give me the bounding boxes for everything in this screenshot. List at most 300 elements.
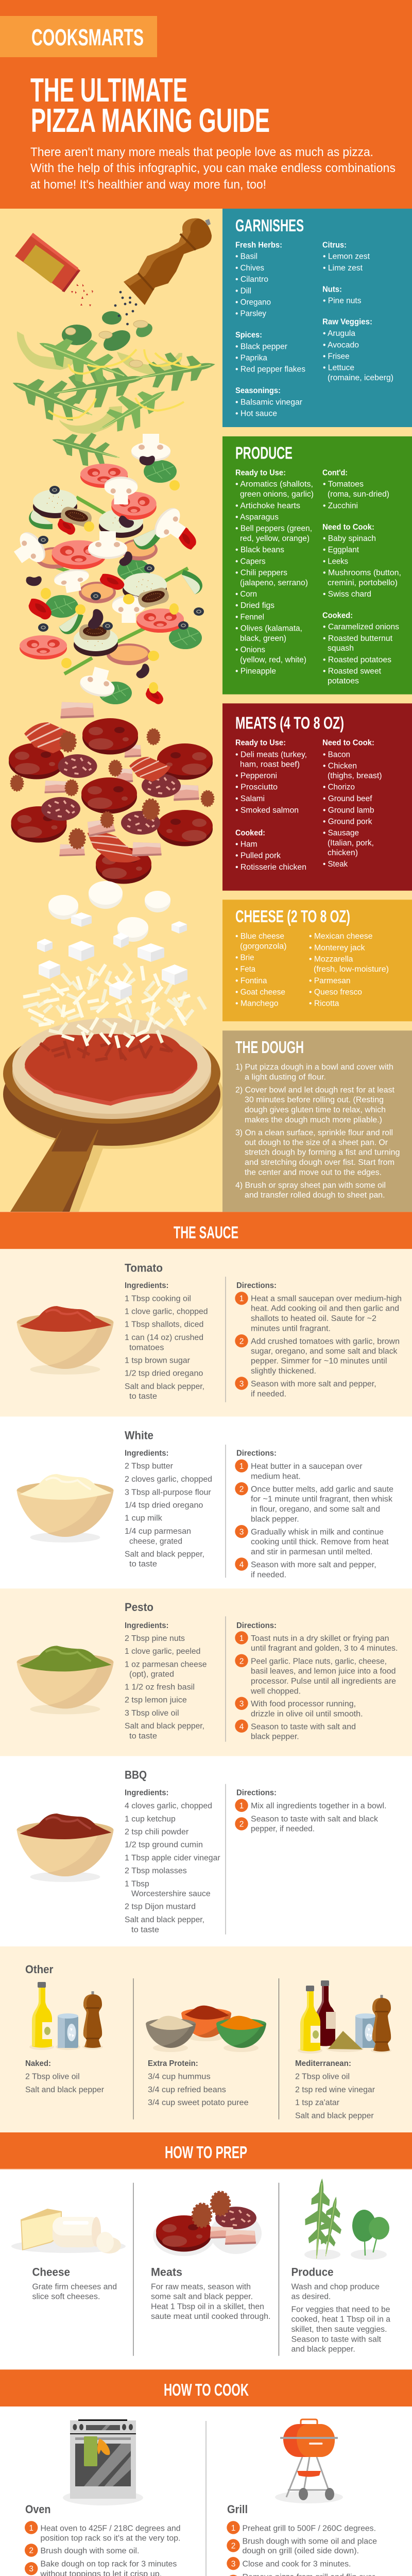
icon: eggplant slices: [33, 489, 167, 656]
panel: cheese: [222, 900, 412, 1021]
list: tomato directions: 2: [239, 1337, 244, 1346]
list: produce right column: • Roasted potatoes: [323, 655, 391, 664]
list: garnishes left column: [235, 241, 305, 418]
list: cheese left column: • Manchego: [235, 999, 278, 1008]
icon: pizza peel: [3, 1018, 224, 1212]
list: pesto ingredients: 3 Tbsp olive oil: [125, 1709, 179, 1718]
list: produce left column: • Onions: [235, 646, 265, 654]
text: dough steps: makes the dough much more pliable.): [245, 1115, 382, 1124]
text: prep meats: Meats: [151, 2266, 182, 2279]
icon: pesto bowl: [16, 1646, 113, 1714]
list: cheese left column: • Fontina: [235, 976, 267, 985]
panel: produce: [222, 436, 412, 694]
icon: oven: [63, 2419, 143, 2505]
list: produce left column: • Dried figs: [235, 601, 274, 610]
text: mediterranean: Mediterranean:: [295, 2059, 351, 2068]
text: prep produce: Produce: [291, 2266, 334, 2279]
text: prep cheese: slice soft cheeses.: [32, 2293, 100, 2301]
list: tomato ingredients: [125, 1281, 208, 1401]
list: white ingredients: 3 Tbsp all-purpose flour: [125, 1488, 211, 1497]
text: dough steps: dough gives gluten time to relax, which: [245, 1106, 386, 1114]
list: white directions: Season with more salt and pepper,: [251, 1561, 376, 1569]
list: oven steps: 2: [29, 2546, 33, 2555]
list: garnishes right column: • Lettuce: [323, 364, 354, 372]
title: PIZZA MAKING GUIDE: [31, 101, 270, 139]
text: dough steps: 2) Cover bowl and let dough rest for at least: [235, 1086, 395, 1095]
list: tomato ingredients: 1 Tbsp cooking oil: [125, 1294, 191, 1303]
list: grill steps: Preheat grill to 500F / 260C degrees.: [242, 2524, 376, 2533]
list: pesto directions: well chopped.: [250, 1687, 301, 1696]
list: meats left column: • Deli meats (turkey,: [235, 750, 307, 759]
icon: avocado slices: [17, 331, 182, 434]
illustration: cheese falling onto pizza peel: [3, 881, 224, 1212]
list: garnishes left column: • Black pepper: [235, 342, 287, 351]
heading: cheese: CHEESE (2 TO 8 OZ): [235, 907, 350, 926]
list: pesto directions: drizzle in olive oil until smooth.: [251, 1709, 363, 1718]
icon: produce leaves: [302, 2177, 389, 2260]
list: garnishes left column: • Basil: [235, 252, 258, 261]
text: dough steps: out dough to the size of a sheet pan. Or: [245, 1139, 388, 1147]
section: bbq sauce: [0, 1756, 412, 1946]
text: prep produce: For veggies that need to be: [291, 2306, 390, 2314]
list: pesto directions: until fragrant and golden, 3 to 4 minutes.: [251, 1644, 398, 1653]
text: mediterranean: 2 Tbsp olive oil: [295, 2072, 350, 2081]
list: produce left column: green onions, garlic): [240, 490, 314, 499]
list: produce left column: [235, 469, 314, 675]
list: bbq ingredients: Worcestershire sauce: [131, 1889, 211, 1898]
list: garnishes left column: • Hot sauce: [235, 410, 277, 418]
list: meats right column: • Sausage: [323, 829, 359, 838]
list: garnishes left column: Seasonings:: [235, 386, 281, 395]
list: white ingredients: 1/4 cup parmesan: [125, 1527, 191, 1536]
list: tomato directions: minutes until fragrant.: [251, 1324, 331, 1333]
list: pesto directions: 2: [239, 1657, 244, 1666]
heading: tomato: Tomato: [125, 1261, 163, 1274]
list: meats right column: • Chicken: [323, 761, 357, 770]
text: naked: 2 Tbsp olive oil: [25, 2072, 80, 2081]
list: bbq directions: Directions:: [236, 1789, 277, 1798]
icon: ground meat: [11, 729, 214, 849]
list: meats right column: (thighs, breast): [328, 772, 382, 781]
text: mediterranean: [295, 2059, 375, 2120]
list: produce left column: • Olives (kalamata,: [235, 624, 302, 633]
list: produce left column: Ready to Use:: [235, 469, 286, 478]
list: produce right column: • Zucchini: [323, 501, 358, 510]
icon: bacon front pieces: [87, 818, 162, 856]
text: mediterranean: 2 tsp red wine vinegar: [295, 2086, 375, 2094]
list: tomato ingredients: to taste: [129, 1392, 157, 1401]
icon: arugula leaves: [5, 323, 218, 474]
icon: asparagus: [40, 497, 188, 674]
list: garnishes left column: • Cilantro: [235, 275, 268, 284]
heading: other: Other: [25, 1963, 54, 1976]
list: meats right column: • Chorizo: [323, 783, 355, 792]
list: bbq ingredients: Ingredients:: [125, 1789, 169, 1798]
list: produce left column: • Bell peppers (green,: [235, 524, 312, 533]
intro text: There aren't many more meals that people love as much as pizza.: [30, 145, 373, 159]
list: pesto directions: [235, 1621, 398, 1741]
list: produce right column: • Baby spinach: [323, 534, 376, 543]
text: dough steps: 1) Put pizza dough in a bowl and cover with: [235, 1063, 393, 1072]
list: pesto ingredients: Salt and black pepper,: [125, 1722, 204, 1731]
icon: salami slices: [41, 754, 181, 835]
list: meats left column: • Pepperoni: [235, 772, 277, 781]
text: extra protein: Extra Protein:: [148, 2059, 198, 2068]
panel: meats: [222, 703, 412, 891]
list: produce right column: [322, 469, 401, 686]
list: garnishes right column: • Lime zest: [323, 264, 363, 273]
list: meats left column: • Smoked salmon: [235, 806, 299, 815]
list: bbq directions: Season to taste with salt and black: [251, 1815, 378, 1823]
list: oven steps: 3: [29, 2565, 33, 2573]
list: bbq directions: [235, 1789, 386, 1834]
section: other sauces: [0, 1946, 412, 2132]
list: produce right column: potatoes: [328, 677, 359, 686]
list: tomato directions: Season with more salt and pepper,: [251, 1380, 376, 1388]
list: garnishes left column: • Balsamic vinegar: [235, 398, 302, 406]
icon: red peppers: [29, 519, 200, 704]
text: extra protein: [148, 2059, 249, 2107]
heading: white: White: [125, 1429, 153, 1442]
list: bbq ingredients: 2 tsp chili powder: [125, 1828, 188, 1837]
list: pesto ingredients: 1 clove garlic, peeled: [125, 1647, 200, 1656]
list: tomato directions: shallots to heated oil. Saute for ~2: [251, 1314, 376, 1323]
list: tomato directions: Add crushed tomatoes with garlic, brown: [251, 1337, 400, 1346]
list: pesto ingredients: to taste: [129, 1732, 157, 1740]
band: the sauce: THE SAUCE: [174, 1223, 238, 1242]
list: bbq ingredients: 1/2 tsp ground cumin: [125, 1841, 203, 1850]
list: pesto directions: black pepper.: [251, 1733, 299, 1741]
heading: pesto: Pesto: [125, 1601, 153, 1614]
icon: corn kernels: [41, 480, 180, 693]
text: dough steps: [235, 1063, 400, 1200]
list: meats right column: [322, 739, 382, 869]
band: how to cook: [0, 2369, 412, 2406]
text: prep produce: [291, 2266, 390, 2354]
list: white directions: medium heat.: [251, 1472, 301, 1481]
toppings background: [0, 209, 412, 1212]
icon: shredded cheese: [23, 963, 205, 1048]
list: meats right column: • Steak: [323, 860, 348, 869]
list: pesto directions: processor. Pulse until all ingredients are: [251, 1677, 396, 1686]
icon: basil leaves: [62, 311, 155, 355]
text: dough steps: and transfer rolled dough to sheet pan.: [245, 1191, 385, 1200]
list: meats right column: • Bacon: [323, 750, 350, 759]
text: dough steps: the center and move out to the edges.: [245, 1168, 382, 1177]
list: cheese right column: • Mozzarella: [309, 955, 353, 964]
illustration: garnishes falling: [5, 218, 218, 474]
illustration: produce falling: [8, 434, 205, 704]
list: produce right column: Cooked:: [322, 611, 353, 620]
list: white ingredients: 2 cloves garlic, chopped: [125, 1475, 212, 1484]
list: white directions: [235, 1449, 393, 1579]
text: prep produce: and black pepper.: [291, 2345, 355, 2354]
list: meats left column: • Ham: [235, 840, 258, 849]
text: prep produce: cooked, heat 1 Tbsp oil in a: [291, 2315, 390, 2324]
list: pesto ingredients: 1 1/2 oz fresh basil: [125, 1683, 195, 1691]
icon: bbq bowl: [16, 1814, 113, 1882]
band: how to cook: HOW TO COOK: [164, 2380, 249, 2399]
list: oven steps: [25, 2521, 183, 2576]
list: bbq ingredients: 2 Tbsp molasses: [125, 1867, 187, 1875]
icon: white sauce bowl: [16, 1474, 113, 1543]
list: pesto directions: Directions:: [236, 1621, 277, 1630]
list: bbq ingredients: 1 Tbsp apple cider vinegar: [125, 1854, 220, 1862]
text: dough steps: 4) Brush or spray sheet pan with some oil: [235, 1181, 386, 1190]
list: produce left column: • Asparagus: [235, 513, 279, 522]
list: produce left column: • Capers: [235, 557, 266, 566]
list: tomato ingredients: Ingredients:: [125, 1281, 169, 1290]
list: garnishes left column: • Dill: [235, 286, 251, 295]
icon: black pepper: [114, 291, 137, 325]
list: meats left column: • Prosciutto: [235, 783, 278, 792]
list: cheese right column: • Parmesan: [309, 976, 350, 985]
text: prep meats: For raw meats, season with: [151, 2282, 251, 2291]
list: pesto directions: Toast nuts in a dry skillet or frying pan: [251, 1634, 389, 1643]
section: pesto sauce: [0, 1588, 412, 1756]
band: the sauce: [0, 1212, 412, 1249]
section: white sauce: [0, 1417, 412, 1588]
list: tomato ingredients: 1 tsp brown sugar: [125, 1356, 190, 1365]
band: how to prep: HOW TO PREP: [165, 2143, 247, 2162]
list: cheese left column: • Brie: [235, 954, 254, 962]
icon: pepperoni slices: [9, 718, 213, 884]
list: produce left column: (yellow, red, white): [240, 655, 306, 664]
list: produce right column: squash: [328, 644, 354, 653]
list: white directions: 3: [239, 1528, 244, 1536]
icon: mushrooms: [8, 434, 192, 700]
text: prep produce: skillet, then saute veggies.: [291, 2325, 387, 2334]
list: white directions: and stir in parmesan until melted.: [251, 1548, 373, 1556]
title: THE ULTIMATE: [30, 71, 187, 109]
list: produce right column: • Mushrooms (button,: [323, 569, 401, 578]
list: white directions: 4: [239, 1561, 244, 1569]
list: tomato directions: 3: [239, 1380, 244, 1388]
list: meats right column: • Ground pork: [323, 817, 372, 826]
section: tomato sauce: [0, 1249, 412, 1417]
text: prep produce: Wash and chop produce: [291, 2282, 380, 2291]
list: white directions: Directions:: [236, 1449, 277, 1458]
list: garnishes right column: • Pine nuts: [323, 296, 362, 305]
list: meats left column: • Salami: [235, 794, 265, 803]
list: pesto directions: 1: [239, 1634, 244, 1643]
text: prep produce: Season to taste with salt: [291, 2335, 382, 2344]
list: meats left column: • Rotisserie chicken: [235, 863, 306, 872]
list: produce left column: red, yellow, orange): [240, 534, 310, 543]
text: mediterranean: Salt and black pepper: [295, 2111, 374, 2120]
illustration: meats falling: [9, 702, 214, 884]
list: produce left column: • Fennel: [235, 613, 264, 621]
icon: black beans: [26, 455, 155, 681]
icon: mozzarella balls: [48, 881, 170, 942]
list: white ingredients: [125, 1449, 212, 1569]
list: bbq ingredients: Salt and black pepper,: [125, 1916, 204, 1924]
list: produce right column: • Swiss chard: [323, 590, 371, 599]
list: white ingredients: Salt and black pepper,: [125, 1550, 204, 1558]
logo box: [0, 16, 157, 57]
icon: sweet potato slices: [36, 539, 158, 665]
list: grill steps: 2: [231, 2542, 235, 2550]
list: white directions: Once butter melts, add garlic and saute: [251, 1485, 393, 1494]
list: produce right column: (roma, sun-dried): [328, 490, 389, 499]
text: extra protein: 3/4 cup refried beans: [148, 2086, 226, 2094]
list: meats left column: • Pulled pork: [235, 852, 281, 860]
list: pesto ingredients: (opt), grated: [129, 1670, 174, 1679]
list: produce left column: • Artichoke hearts: [235, 501, 300, 510]
list: bbq ingredients: [125, 1789, 220, 1934]
text: prep cheese: [32, 2266, 117, 2301]
list: produce left column: • Pineapple: [235, 667, 276, 675]
list: cheese right column: • Monterey jack: [309, 943, 365, 952]
list: tomato ingredients: 1/2 tsp dried oregano: [125, 1369, 203, 1378]
header background: [0, 0, 412, 209]
list: garnishes left column: • Oregano: [235, 298, 271, 307]
list: white directions: 1: [239, 1462, 244, 1471]
list: produce right column: Need to Cook:: [322, 523, 374, 532]
list: produce left column: • Corn: [235, 590, 257, 599]
list: produce left column: • Chili peppers: [235, 569, 287, 578]
icon: mediterranean bottles: [298, 1980, 391, 2054]
list: white ingredients: 2 Tbsp butter: [125, 1462, 173, 1471]
list: produce right column: • Leeks: [323, 557, 348, 566]
panel: the dough: [222, 1030, 412, 1212]
list: bbq directions: 2: [239, 1820, 244, 1829]
list: white directions: in flour, oregano, and some salt and: [251, 1505, 380, 1514]
list: oven steps: Heat oven to 425F / 218C degrees and: [40, 2524, 180, 2533]
list: oven steps: position top rack so it's at the very top.: [40, 2534, 180, 2543]
list: garnishes right column: • Lemon zest: [323, 252, 370, 261]
list: grill steps: Close and cook for 3 minutes.: [242, 2560, 351, 2569]
list: bbq ingredients: 1 Tbsp: [125, 1879, 149, 1888]
text: naked: Naked:: [25, 2059, 51, 2068]
icon: meats: [153, 2192, 262, 2256]
list: produce left column: • Aromatics (shallots,: [235, 480, 313, 489]
icon: red pepper flakes: [71, 284, 93, 307]
intro text: [30, 145, 396, 192]
list: cheese left column: • Goat cheese: [235, 988, 285, 996]
list: garnishes left column: Fresh Herbs:: [235, 241, 282, 250]
heading: produce: PRODUCE: [235, 444, 293, 463]
icon: lemon zest: [48, 349, 201, 418]
list: white directions: cooking until thick. Remove from heat: [251, 1538, 389, 1547]
list: garnishes left column: • Red pepper flakes: [235, 365, 305, 374]
icon: cucumber slices: [29, 510, 205, 637]
list: cheese left column: • Feta: [235, 965, 255, 974]
list: white ingredients: 1 cup milk: [125, 1514, 162, 1523]
list: bbq ingredients: to taste: [131, 1925, 159, 1934]
text: prep meats: saute meat until cooked through.: [151, 2312, 271, 2321]
heading: the dough: THE DOUGH: [235, 1038, 304, 1057]
panel: garnishes: [222, 209, 412, 427]
list: pesto ingredients: 2 tsp lemon juice: [125, 1696, 187, 1705]
text: naked: [25, 2059, 104, 2094]
list: white directions: Gradually whisk in milk and continue: [251, 1528, 384, 1536]
text: dough steps: 3) On a clean surface, sprinkle flour and roll: [235, 1128, 393, 1137]
list: cheese right column: [309, 932, 389, 1008]
text: dough steps: and stretching dough over fist. Start from: [245, 1158, 394, 1167]
list: bbq directions: Mix all ingredients together in a bowl.: [251, 1802, 386, 1810]
icon: pine nuts: [65, 320, 148, 367]
list: bbq ingredients: 2 tsp Dijon mustard: [125, 1903, 196, 1911]
text: prep meats: some salt and black pepper.: [151, 2293, 253, 2301]
list: tomato directions: sugar, oregano, and some salt and black: [251, 1347, 398, 1355]
list: oven steps: Bake dough on top rack for 3 minutes: [40, 2560, 177, 2569]
heading: grill: Grill: [227, 2503, 248, 2516]
band: how to prep: [0, 2132, 412, 2170]
list: produce right column: • Eggplant: [323, 546, 359, 554]
title: [30, 71, 270, 139]
list: grill steps: Brush dough with some oil and place: [242, 2537, 377, 2546]
list: bbq directions: pepper, if needed.: [251, 1825, 315, 1834]
intro text: at home! It's healthier and way more fun, too!: [30, 178, 266, 192]
text: extra protein: 3/4 cup hummus: [148, 2072, 211, 2081]
list: tomato ingredients: tomatoes: [129, 1343, 164, 1352]
list: garnishes left column: • Parsley: [235, 310, 266, 318]
list: tomato ingredients: 1 clove garlic, chopped: [125, 1308, 208, 1316]
list: white ingredients: 1/4 tsp dried oregano: [125, 1501, 203, 1510]
text: extra protein: 3/4 cup sweet potato puree: [148, 2098, 249, 2107]
list: white ingredients: cheese, grated: [129, 1537, 182, 1546]
text: dough steps: stretch dough by forming a fist and turning: [245, 1148, 400, 1157]
logo box: COOKSMARTS: [31, 24, 144, 50]
text: mediterranean: 1 tsp za'atar: [295, 2098, 339, 2107]
list: pesto ingredients: 2 Tbsp pine nuts: [125, 1634, 185, 1643]
icon: olives: [38, 486, 204, 632]
list: grill steps: 1: [231, 2524, 235, 2533]
list: produce left column: (jalapeno, serrano): [240, 579, 308, 587]
list: cheese left column: (gorgonzola): [240, 942, 286, 951]
list: meats left column: Cooked:: [235, 829, 265, 838]
list: grill steps: [227, 2521, 378, 2576]
list: produce right column: Cont'd:: [322, 469, 348, 478]
icon: tomato slices: [20, 464, 184, 659]
list: cheese right column: • Ricotta: [309, 999, 339, 1008]
icon: figs: [59, 505, 170, 640]
list: tomato directions: Heat a small saucepan over medium-high: [251, 1294, 402, 1303]
list: meats left column: [235, 739, 307, 872]
icon: extra protein bowls: [146, 2006, 266, 2052]
text: dough steps: 30 minutes before rolling out. (Resting: [245, 1096, 384, 1105]
text: prep produce: as desired.: [291, 2293, 331, 2301]
list: white ingredients: to taste: [129, 1560, 157, 1569]
icon: grill: [275, 2419, 343, 2503]
icon: spinach leaves: [45, 460, 202, 704]
icon: cheese shadow on sauce: [40, 1041, 173, 1060]
list: produce left column: • Black beans: [235, 546, 284, 554]
icon: cheese wedge and mozzarella: [11, 2209, 126, 2253]
list: produce right column: cremini, portobello): [328, 579, 398, 587]
list: garnishes right column: • Avocado: [323, 341, 359, 349]
list: tomato directions: slightly thickened.: [251, 1367, 316, 1376]
list: meats right column: (Italian, pork,: [328, 839, 374, 848]
list: pesto directions: 3: [239, 1700, 244, 1708]
heading: meats: MEATS (4 TO 8 OZ): [235, 713, 344, 732]
list: pesto directions: basil leaves, and lemon juice into a food: [251, 1667, 396, 1676]
list: grill steps: 3: [231, 2560, 235, 2569]
list: pesto directions: Season to taste with salt and: [251, 1722, 356, 1731]
icon: naked oil salt pepper: [29, 1982, 103, 2050]
text: prep cheese: Grate firm cheeses and: [32, 2282, 117, 2291]
list: garnishes right column: Citrus:: [322, 241, 347, 250]
list: cheese right column: (fresh, low-moisture): [314, 965, 389, 974]
icon: cheese cubes: [37, 912, 187, 1000]
section: how to prep: [0, 2170, 412, 2369]
list: garnishes right column: • Frisee: [323, 352, 349, 361]
icon: bacon back pieces: [45, 702, 199, 856]
text: naked: Salt and black pepper: [25, 2086, 104, 2094]
list: tomato ingredients: 1 Tbsp shallots, diced: [125, 1320, 203, 1329]
list: tomato directions: 1: [239, 1294, 244, 1303]
